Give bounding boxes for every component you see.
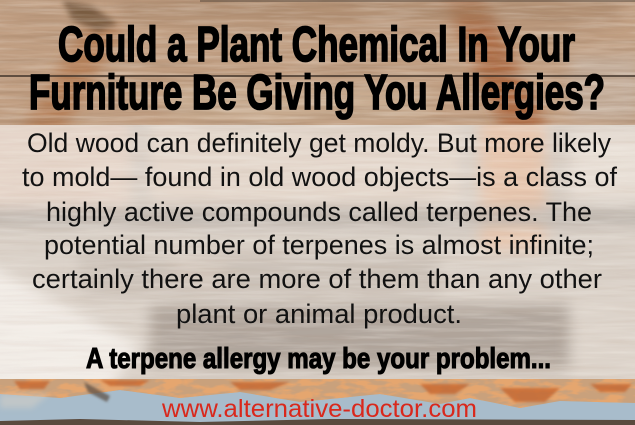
body text block: highly active compounds called terpenes. The [46,197,592,227]
body text block: Old wood can definitely get moldy. But more likely [27,128,611,158]
body text block: potential number of terpenes is almost infinite; [44,230,594,260]
callout: terpene allergy: A terpene allergy may be your problem... [86,343,551,375]
body text block: plant or animal product. [176,299,462,329]
rusted band [0,379,635,425]
body text block: to mold— found in old wood objects—is a class of [22,162,617,192]
body text block [22,128,617,329]
title [29,18,605,120]
translucent panel overlay [0,125,635,379]
website url: www.alternative-doctor.com [161,395,477,423]
body text block: certainly there are more of them than any other [32,264,602,294]
